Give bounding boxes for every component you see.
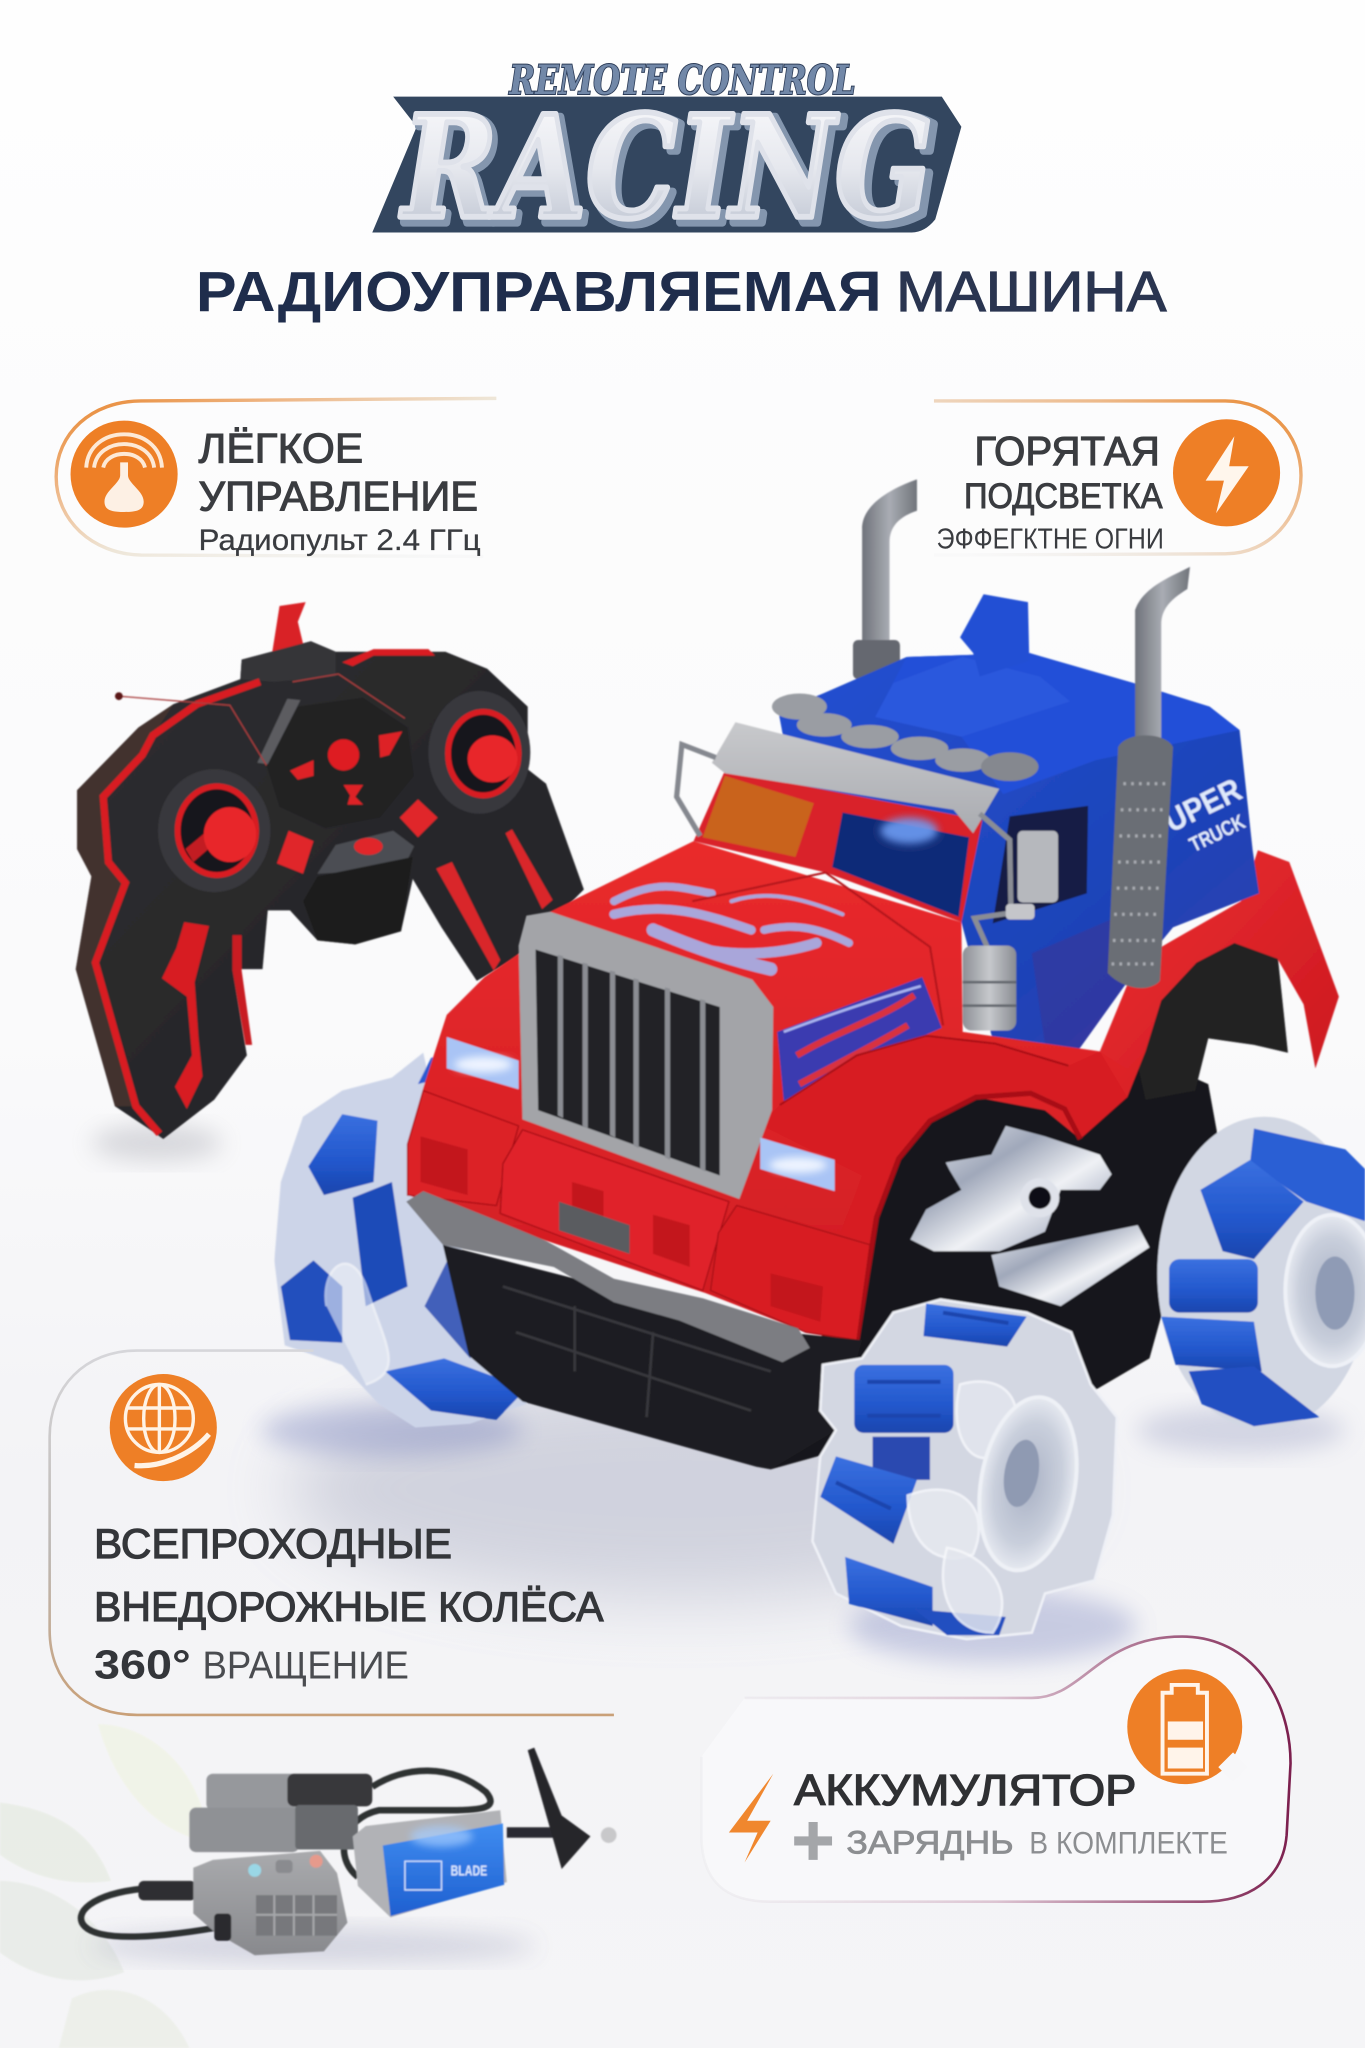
cab lower shade bbox=[1032, 914, 1123, 1057]
icon: radio remote bbox=[71, 421, 178, 528]
text: easy control: ЛЁГКОЕ bbox=[199, 424, 363, 471]
callout: backlight bbox=[934, 401, 1301, 556]
lower center panel bbox=[303, 857, 413, 944]
top block bbox=[240, 641, 336, 682]
cables bbox=[344, 1771, 491, 1877]
text: backlight: ЭФФЕГКТНЕ ОГНИ bbox=[937, 524, 1164, 556]
text: all-terrain wheels: ВНЕДОРОЖНЫЕ КОЛЁСА bbox=[94, 1583, 604, 1630]
handle stripe bbox=[162, 922, 209, 1109]
roller ribs bbox=[836, 1313, 1008, 1509]
windshield right bbox=[832, 812, 969, 917]
grille frame bbox=[519, 912, 773, 1199]
plug bbox=[138, 1881, 196, 1900]
grille bbox=[536, 950, 720, 1176]
headlights bbox=[447, 1037, 835, 1191]
lower black bumper bbox=[443, 1245, 862, 1469]
right joystick bbox=[428, 691, 530, 814]
chrome engine bbox=[910, 1126, 1149, 1306]
right handle stripes bbox=[436, 829, 553, 970]
right handle bbox=[413, 769, 584, 981]
floor shadow under truck bbox=[91, 1125, 1345, 1663]
side text: UPER bbox=[1158, 770, 1247, 839]
left joystick bbox=[158, 769, 270, 892]
callout border bbox=[50, 1351, 614, 1715]
blue charger box bbox=[353, 1810, 507, 1917]
front red center panel bbox=[500, 1130, 729, 1290]
text: backlight: ПОДСВЕТКА bbox=[964, 477, 1163, 516]
left brown edge bbox=[76, 704, 174, 1106]
left fender panel bbox=[408, 1091, 519, 1206]
remote control bbox=[76, 602, 584, 1139]
windshield frame bbox=[694, 771, 982, 922]
icon: globe bbox=[110, 1374, 217, 1481]
icon: plus bbox=[794, 1822, 832, 1860]
badge bbox=[559, 1202, 630, 1254]
side text: TRUCK bbox=[1186, 810, 1249, 857]
title: РАДИОУПРАВЛЯЕМАЯ bbox=[196, 260, 882, 323]
icon: orange bolt bbox=[729, 1774, 773, 1863]
base red body bbox=[408, 841, 1127, 1340]
text: easy control bbox=[199, 424, 481, 557]
roof highlight bbox=[875, 653, 1240, 794]
text: backlight bbox=[937, 428, 1164, 556]
exhaust: right stack bbox=[1108, 567, 1190, 988]
callout border bbox=[934, 401, 1301, 555]
decorative leaves bbox=[0, 1724, 209, 2048]
windshield left bbox=[703, 776, 814, 857]
logo plate bbox=[372, 97, 961, 232]
arrows bbox=[290, 731, 402, 805]
text: all-terrain wheels: ВСЕПРОХОДНЫЕ bbox=[94, 1520, 452, 1567]
logo: Remote Control Racing bbox=[372, 56, 961, 256]
oval button bbox=[354, 838, 383, 855]
hood seam bbox=[692, 872, 943, 1025]
text: charger included: В КОМПЛЕКТЕ bbox=[1029, 1825, 1228, 1860]
clear lobes bbox=[957, 1382, 1016, 1458]
icon: lightning bbox=[1173, 419, 1280, 526]
text: all-terrain wheels: ВРАЩЕНИЕ bbox=[202, 1644, 409, 1687]
text: backlight: ГОРЯТАЯ bbox=[974, 428, 1160, 474]
cylinder: lower bbox=[189, 1805, 358, 1852]
antenna bbox=[507, 1748, 617, 1869]
truck bbox=[274, 479, 1365, 1639]
side flame panel bbox=[777, 977, 942, 1101]
exhaust: left stack bbox=[853, 479, 917, 679]
battery and charger product bbox=[81, 1748, 617, 1964]
icon: battery bbox=[1127, 1669, 1248, 1784]
callout: easy control bbox=[56, 398, 496, 557]
grey bar bbox=[257, 699, 300, 764]
dark chassis and rear tyre bbox=[771, 1045, 1221, 1469]
left mirror bbox=[677, 744, 716, 836]
roof scoop bbox=[875, 657, 1070, 737]
text: battery: АККУМУЛЯТОР bbox=[794, 1767, 1136, 1815]
center octagon bbox=[266, 697, 414, 828]
wheel: rear right bbox=[1157, 1117, 1365, 1430]
text: easy control: Радиопульт 2.4 ГГц bbox=[199, 524, 481, 557]
callout border bbox=[701, 1637, 1291, 1902]
text: all-terrain wheels bbox=[94, 1520, 604, 1687]
door window bbox=[993, 806, 1088, 923]
shadow bbox=[91, 1928, 536, 1964]
logo line: RACING: RACING bbox=[403, 87, 939, 256]
grey chevron bbox=[317, 831, 414, 874]
front fender arch bbox=[760, 1036, 1127, 1340]
trigger bbox=[272, 602, 306, 656]
title bbox=[196, 260, 1167, 323]
hub bbox=[966, 1389, 1090, 1578]
visor bbox=[712, 722, 999, 833]
grey bumper bbox=[406, 1191, 810, 1362]
cylinder: upper bbox=[206, 1774, 372, 1810]
body bbox=[76, 641, 528, 1139]
grey battery box bbox=[193, 1851, 347, 1955]
roof lights bbox=[772, 694, 1038, 781]
logo line: RACING: RACING bbox=[399, 86, 933, 251]
rear fender bbox=[1088, 850, 1339, 1117]
hood flames bbox=[614, 887, 849, 969]
front right panel bbox=[711, 1206, 870, 1340]
logo line: REMOTE CONTROL: REMOTE CONTROL bbox=[509, 56, 856, 104]
center button bbox=[328, 739, 359, 771]
blue rollers bbox=[923, 1304, 1027, 1347]
wheel: front right bbox=[812, 1300, 1117, 1639]
red buttons bbox=[277, 831, 313, 874]
wheel: rear left bbox=[274, 1051, 526, 1428]
callout: battery bbox=[701, 1637, 1291, 1902]
text: all-terrain wheels: 360° bbox=[94, 1641, 191, 1687]
callout: all-terrain wheels bbox=[50, 1351, 614, 1715]
callout border bbox=[56, 398, 496, 556]
roof fin bbox=[960, 594, 1029, 677]
right mirror arm bbox=[974, 814, 1011, 953]
side fuel tank bbox=[963, 946, 1016, 1031]
clear wheel body bbox=[812, 1300, 1117, 1639]
dark inner rear arch bbox=[1136, 938, 1288, 1100]
antenna wires bbox=[119, 674, 405, 765]
title: МАШИНА bbox=[896, 260, 1167, 323]
right mirror bbox=[1018, 831, 1058, 903]
handle inner stripe bbox=[233, 935, 252, 1045]
red trim bbox=[95, 682, 260, 1134]
fender shading bbox=[780, 1036, 1068, 1105]
blue charger box: BLADE bbox=[451, 1864, 488, 1880]
text: charger included bbox=[846, 1823, 1228, 1860]
recesses bbox=[421, 1136, 823, 1322]
cab body bbox=[779, 653, 1259, 1057]
bumper block lines bbox=[503, 1287, 771, 1417]
text: easy control: УПРАВЛЕНИЕ bbox=[199, 473, 478, 520]
text: charger included: ЗАРЯДНЬ bbox=[846, 1823, 1014, 1860]
